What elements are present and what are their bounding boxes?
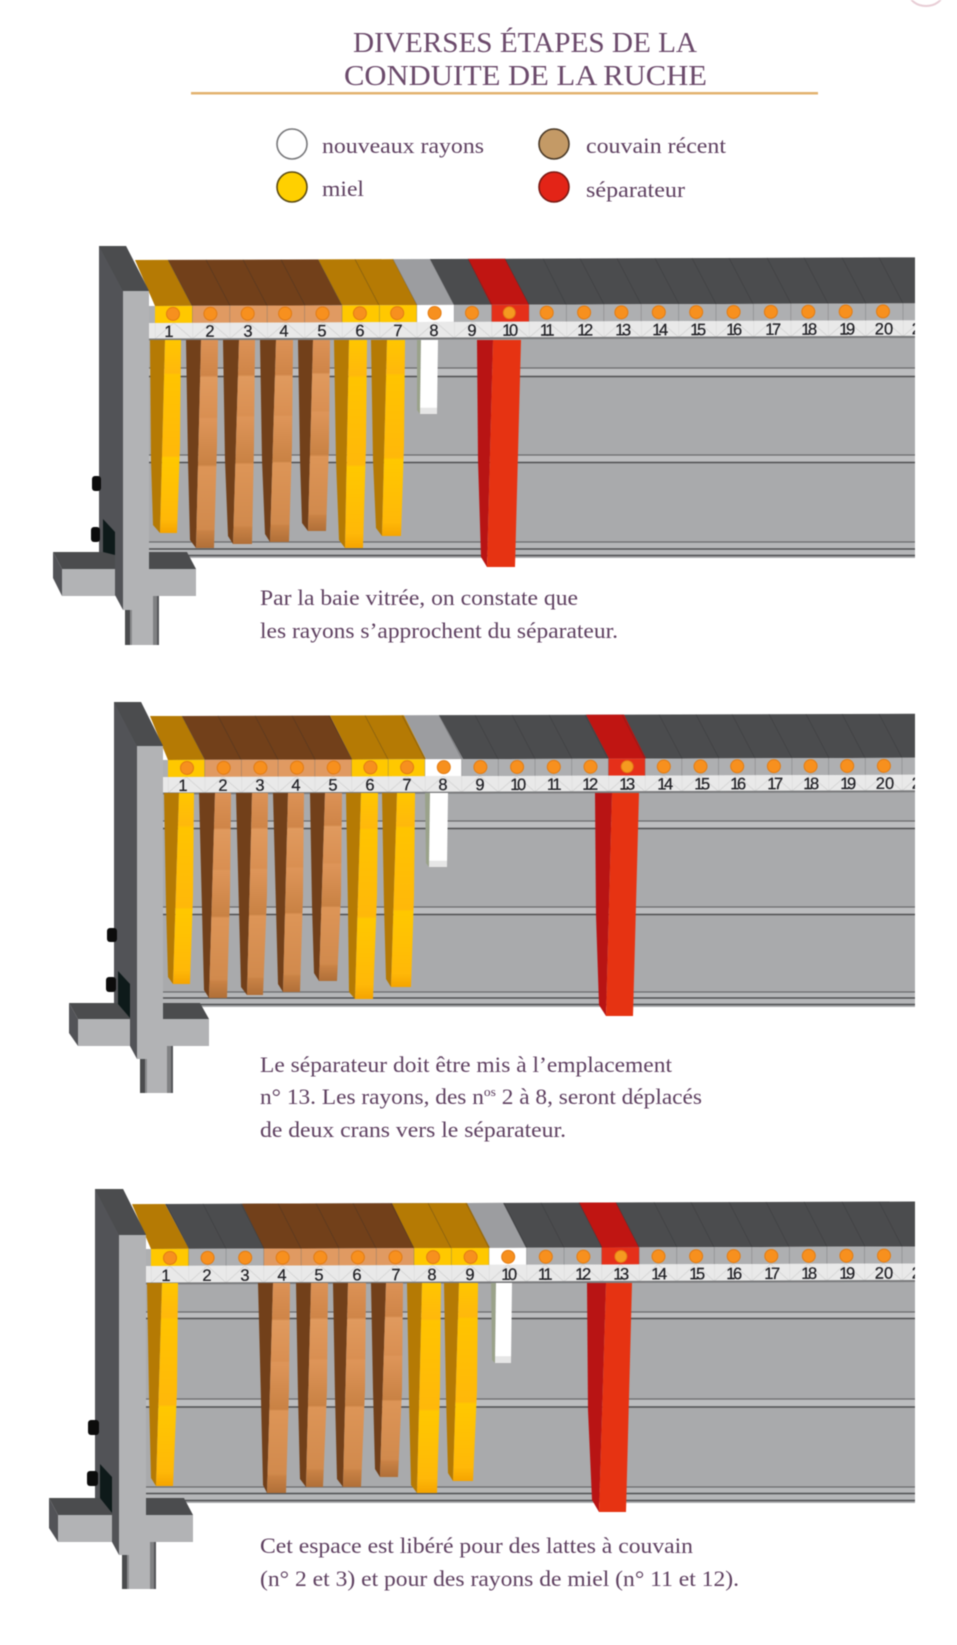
numbered ruler: 7 <box>391 1266 401 1284</box>
numbered ruler: 8 <box>429 322 439 340</box>
numbered ruler: 20 <box>875 320 893 338</box>
top bars, cells and numbered ruler <box>150 714 930 795</box>
numbered ruler: 16 <box>730 775 746 793</box>
caption 2: n° 13. Les rayons, des n <box>260 1084 476 1109</box>
caption 2: 2 à 8, seront déplacés <box>496 1084 702 1109</box>
numbered ruler: 3 <box>255 777 265 795</box>
numbered ruler <box>163 775 930 795</box>
numbered ruler: 2 <box>202 1267 212 1285</box>
numbered ruler: 7 <box>402 776 412 794</box>
caption 3 <box>260 1533 739 1591</box>
numbered ruler: 12 <box>582 776 598 794</box>
numbered ruler: 10 <box>502 322 518 340</box>
numbered ruler: 9 <box>475 776 485 794</box>
caption 2: Le séparateur doit être mis à l’emplacement <box>260 1052 673 1077</box>
legend: nouveaux rayons: nouveaux rayons <box>322 133 484 158</box>
panel: étape 3 <box>49 1189 930 1591</box>
numbered ruler: 14 <box>651 1265 667 1283</box>
panel: étape 1 <box>53 246 930 645</box>
numbered ruler: 10 <box>501 1266 517 1284</box>
caption 3: Cet espace est libéré pour des lattes à couvain <box>260 1533 693 1558</box>
caption 1: les rayons s’approchent du séparateur. <box>260 618 618 643</box>
numbered ruler: 6 <box>355 322 365 340</box>
numbered ruler: 10 <box>510 776 526 794</box>
numbered ruler: 18 <box>801 1265 817 1283</box>
numbered ruler: 11 <box>547 776 561 794</box>
numbered ruler: 4 <box>279 323 289 341</box>
legend: séparateur <box>539 172 686 202</box>
numbered ruler <box>149 320 930 341</box>
numbered ruler: 6 <box>352 1266 362 1284</box>
numbered ruler: 15 <box>689 1265 705 1283</box>
numbered ruler: 7 <box>393 322 403 340</box>
top of bars <box>132 1201 915 1249</box>
numbered ruler: 19 <box>839 1265 855 1283</box>
numbered ruler: 12 <box>577 321 593 339</box>
numbered ruler: 5 <box>314 1266 324 1284</box>
numbered ruler: 1 <box>161 1267 171 1285</box>
numbered ruler: 11 <box>540 322 554 340</box>
top bars, cells and numbered ruler <box>132 1201 930 1285</box>
cells <box>163 758 915 777</box>
caption 2: de deux crans vers le séparateur. <box>260 1117 566 1142</box>
numbered ruler: 5 <box>317 322 327 340</box>
caption 2 <box>260 1052 702 1142</box>
numbered ruler: 13 <box>615 321 631 339</box>
numbered ruler: 19 <box>840 775 856 793</box>
numbered ruler: 20 <box>876 775 894 793</box>
numbered ruler: 12 <box>575 1266 591 1284</box>
caption 1: Par la baie vitrée, on constate que <box>260 585 578 610</box>
corner ornament <box>909 0 943 6</box>
legend: couvain récent: couvain récent <box>586 133 726 158</box>
numbered ruler: 21 <box>912 320 930 338</box>
numbered ruler: 8 <box>427 1266 437 1284</box>
title: DIVERSES ÉTAPES DE LA <box>353 26 697 59</box>
hanging combs: miel, couvain, nouveau rayon <box>164 793 448 999</box>
numbered ruler: 6 <box>365 776 375 794</box>
numbered ruler: 4 <box>277 1267 287 1285</box>
numbered ruler: 13 <box>613 1265 629 1283</box>
numbered ruler: 16 <box>726 321 742 339</box>
numbered ruler: 9 <box>465 1266 475 1284</box>
title underline <box>191 92 818 94</box>
cell dots <box>164 1249 890 1264</box>
top bars, cells and numbered ruler <box>135 257 930 341</box>
cell dots <box>166 305 890 320</box>
back panel with rails <box>149 338 915 558</box>
numbered ruler: 2 <box>205 323 215 341</box>
numbered ruler: 9 <box>467 322 477 340</box>
numbered ruler: 1 <box>164 323 174 341</box>
panel: étape 2 <box>69 702 930 1142</box>
numbered ruler: 19 <box>839 321 855 339</box>
cell dots <box>180 759 890 774</box>
legend <box>277 129 726 202</box>
numbered ruler: 17 <box>767 775 783 793</box>
numbered ruler: 20 <box>875 1265 893 1283</box>
caption 2: os <box>484 1084 496 1099</box>
legend: miel: miel <box>322 176 364 201</box>
numbered ruler: 17 <box>765 321 781 339</box>
legend: nouveaux rayons <box>277 129 484 159</box>
numbered ruler: 5 <box>328 776 338 795</box>
legend: miel <box>277 172 364 202</box>
back panel with rails <box>163 791 915 1007</box>
numbered ruler: 11 <box>538 1266 552 1284</box>
numbered ruler: 1 <box>178 777 188 795</box>
numbered ruler: 15 <box>690 321 706 339</box>
cells <box>149 303 915 323</box>
numbered ruler: 15 <box>694 775 710 793</box>
numbered ruler: 14 <box>652 321 668 339</box>
numbered ruler: 3 <box>240 1267 250 1285</box>
numbered ruler: 3 <box>243 323 253 341</box>
numbered ruler: 21 <box>912 1264 930 1282</box>
hanging combs: miel, couvain, nouveau rayon <box>150 340 438 548</box>
numbered ruler: 13 <box>619 776 635 794</box>
numbered ruler: 14 <box>657 775 673 794</box>
numbered ruler: 18 <box>803 775 819 793</box>
top of bars <box>135 257 915 306</box>
numbered ruler: 2 <box>218 777 228 795</box>
title <box>344 26 707 92</box>
hive frame: post, crossbar, leg, knobs <box>49 1189 193 1589</box>
separator <box>477 340 521 567</box>
title: CONDUITE DE LA RUCHE <box>344 60 707 92</box>
numbered ruler: 18 <box>801 321 817 339</box>
numbered ruler <box>146 1263 930 1285</box>
legend: séparateur: séparateur <box>586 177 686 202</box>
hanging combs: miel, couvain, nouveau rayon <box>147 1283 512 1493</box>
numbered ruler: 8 <box>438 776 448 794</box>
cells <box>146 1246 915 1266</box>
caption 1 <box>260 585 618 643</box>
numbered ruler: 4 <box>291 777 301 795</box>
separator <box>595 793 639 1016</box>
hive frame: post, crossbar, leg, knobs <box>69 702 209 1093</box>
numbered ruler: 16 <box>726 1265 742 1283</box>
separator <box>587 1283 632 1512</box>
hive frame: post, crossbar, leg, knobs <box>53 246 196 645</box>
caption 3: (n° 2 et 3) et pour des rayons de miel (n° 11 et 12). <box>260 1566 739 1591</box>
numbered ruler: 21 <box>912 775 930 793</box>
numbered ruler: 17 <box>764 1265 780 1283</box>
top of bars <box>150 714 915 760</box>
legend: couvain récent <box>539 129 726 159</box>
back panel with rails <box>146 1281 915 1503</box>
